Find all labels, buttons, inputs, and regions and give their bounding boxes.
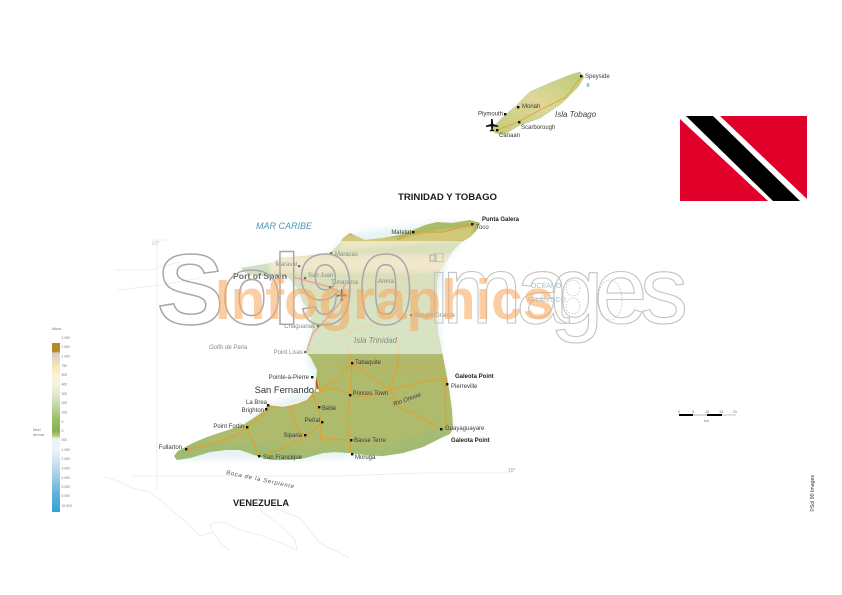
- Tobago labels: Isla Tobago: [555, 110, 597, 119]
- label: Mar Caribe: MAR CARIBE: [256, 220, 313, 231]
- Trinidad south labels: Tabaquite: [355, 360, 382, 366]
- Trinidad south labels: Pointe-à-Pierre: [269, 375, 310, 381]
- Trinidad south labels: Fullarton: [159, 445, 182, 451]
- Tobago road: [497, 77, 581, 130]
- legend labels: 3 000: [62, 466, 70, 470]
- Tobago island: [493, 72, 590, 135]
- Trinidad north labels: Point Lisas: [274, 350, 303, 356]
- Trinidad north labels: Punta Galera: [482, 217, 520, 223]
- legend labels: 0: [62, 429, 64, 433]
- Trinidad south labels: Bébé: [322, 406, 337, 412]
- flag of Trinidad and Tobago: [680, 116, 807, 201]
- latitude labels: 10°: [508, 468, 516, 474]
- city markers: [185, 75, 582, 457]
- Trinidad north labels: San Juan: [308, 273, 333, 279]
- legend labels: 1 000: [62, 354, 70, 358]
- label: Venezuela: VENEZUELA: [233, 498, 289, 509]
- Tobago labels: Canaan: [499, 133, 520, 139]
- Trinidad south labels: Brighton: [242, 408, 264, 414]
- map title: TRINIDAD Y TOBAGO: [398, 191, 497, 202]
- coast halo: [177, 222, 480, 460]
- watermark: Infographics: Infographics: [215, 268, 554, 331]
- label: Boca de la Serpiente: Boca de la Serpiente: [226, 470, 295, 490]
- main highway: [293, 277, 347, 390]
- pale wash over central band: [241, 241, 463, 354]
- Trinidad south labels: Princes Town: [352, 391, 388, 397]
- icon: airport plane Trinidad: [337, 289, 347, 301]
- legend labels: 500: [62, 373, 67, 377]
- Trinidad north labels: Arima: [378, 279, 394, 285]
- scale labels: 10: [705, 410, 709, 414]
- legend labels: 750: [62, 364, 67, 368]
- Trinidad south labels: San Francique: [263, 455, 303, 461]
- legend labels: 2 000: [62, 336, 70, 340]
- Trinidad south labels: La Brea: [246, 400, 268, 406]
- Trinidad north labels: [209, 217, 520, 356]
- legend labels: [33, 327, 72, 508]
- legend labels: 10 000: [62, 504, 72, 508]
- legend labels: 400: [62, 382, 67, 386]
- faded city markers: [298, 252, 412, 353]
- scale labels: [678, 410, 737, 423]
- Tobago labels: Speyside: [585, 74, 610, 80]
- label: Oceano Atlantico: ATLÁNTICO: [527, 295, 566, 304]
- legend labels: 0: [62, 420, 64, 424]
- scale labels: 20: [733, 410, 737, 414]
- legend labels: 1 500: [62, 345, 70, 349]
- Trinidad north labels: Maracas: [335, 252, 358, 258]
- latitude labels: [152, 241, 516, 474]
- legend labels: 5 000: [62, 485, 70, 489]
- Tobago labels: [478, 74, 610, 139]
- copyright: ©Sol 90 Images: [809, 475, 816, 512]
- Trinidad south labels: Basse Terre: [354, 438, 387, 444]
- legend labels: 6 000: [62, 494, 70, 498]
- Trinidad north labels: Golfo de Paria: [209, 345, 248, 351]
- Trinidad island: [170, 215, 490, 470]
- Trinidad south labels: Point Fortin: [213, 424, 244, 430]
- Trinidad north labels: Tunapuna: [331, 280, 358, 286]
- Trinidad north labels: Maraval: [276, 262, 297, 268]
- label: Oceano Atlantico: OCÉANO: [531, 281, 562, 290]
- scale labels: km: [704, 419, 709, 423]
- latitude labels: 62°: [152, 241, 160, 247]
- legend labels: 200: [62, 401, 67, 405]
- Trinidad north labels: Port of Spain: [233, 272, 287, 281]
- Trinidad south labels: Galeota Point: [455, 374, 494, 380]
- Trinidad south labels: Siparia: [283, 433, 303, 439]
- Tobago labels: Plymouth: [478, 112, 503, 118]
- scale labels: 15: [719, 410, 723, 414]
- Trinidad south labels: Galeota Point: [451, 438, 490, 444]
- scale labels: 5: [692, 410, 694, 414]
- elevation legend: [33, 327, 72, 512]
- legend labels: 1 000: [62, 448, 70, 452]
- Trinidad south labels: Pierreville: [451, 384, 478, 390]
- legend labels: Nivel: [33, 428, 41, 432]
- Trinidad north labels: Chaguanas: [284, 324, 315, 330]
- Trinidad north labels: Isla Trinidad: [354, 336, 398, 345]
- Trinidad north labels: Matelot: [391, 230, 411, 236]
- legend labels: 200: [62, 438, 67, 442]
- graticule and neighbouring coastlines: [105, 240, 512, 558]
- Trinidad south labels: Moruga: [355, 455, 376, 461]
- Trinidad south labels: Peñal: [305, 418, 320, 424]
- Tobago labels: Moriah: [522, 104, 540, 110]
- Trinidad south labels: San Fernando: [255, 384, 314, 395]
- legend labels: del mar: [33, 433, 45, 437]
- island relief: [170, 215, 490, 470]
- scale labels: 0: [678, 410, 680, 414]
- legend labels: Altura: [52, 327, 61, 331]
- Trinidad north labels: Sangre Grande: [414, 313, 456, 319]
- legend colour bar: [52, 343, 60, 512]
- watermark: dashed ornaments: [566, 280, 622, 320]
- road network: [187, 224, 472, 455]
- legend labels: 300: [62, 392, 67, 396]
- label: Oceano Atlantico: [527, 281, 566, 304]
- Trinidad north labels: Toco: [476, 225, 489, 231]
- watermark: Sol90 outline: Sol90: [157, 234, 414, 346]
- islet: [586, 83, 590, 87]
- Trinidad south labels: Guayaguayare: [445, 426, 485, 432]
- scale bar: [678, 410, 737, 423]
- Trinidad south labels: [159, 360, 494, 461]
- watermark: images outline: images: [428, 237, 688, 344]
- legend labels: 4 000: [62, 476, 70, 480]
- Tobago labels: Scarborough: [521, 125, 555, 131]
- small square marker: [430, 255, 436, 261]
- Trinidad south labels: Rio Ortoire: [393, 392, 423, 408]
- legend labels: 100: [62, 410, 67, 414]
- icon: airport plane Tobago: [486, 119, 498, 131]
- legend labels: 2 000: [62, 457, 70, 461]
